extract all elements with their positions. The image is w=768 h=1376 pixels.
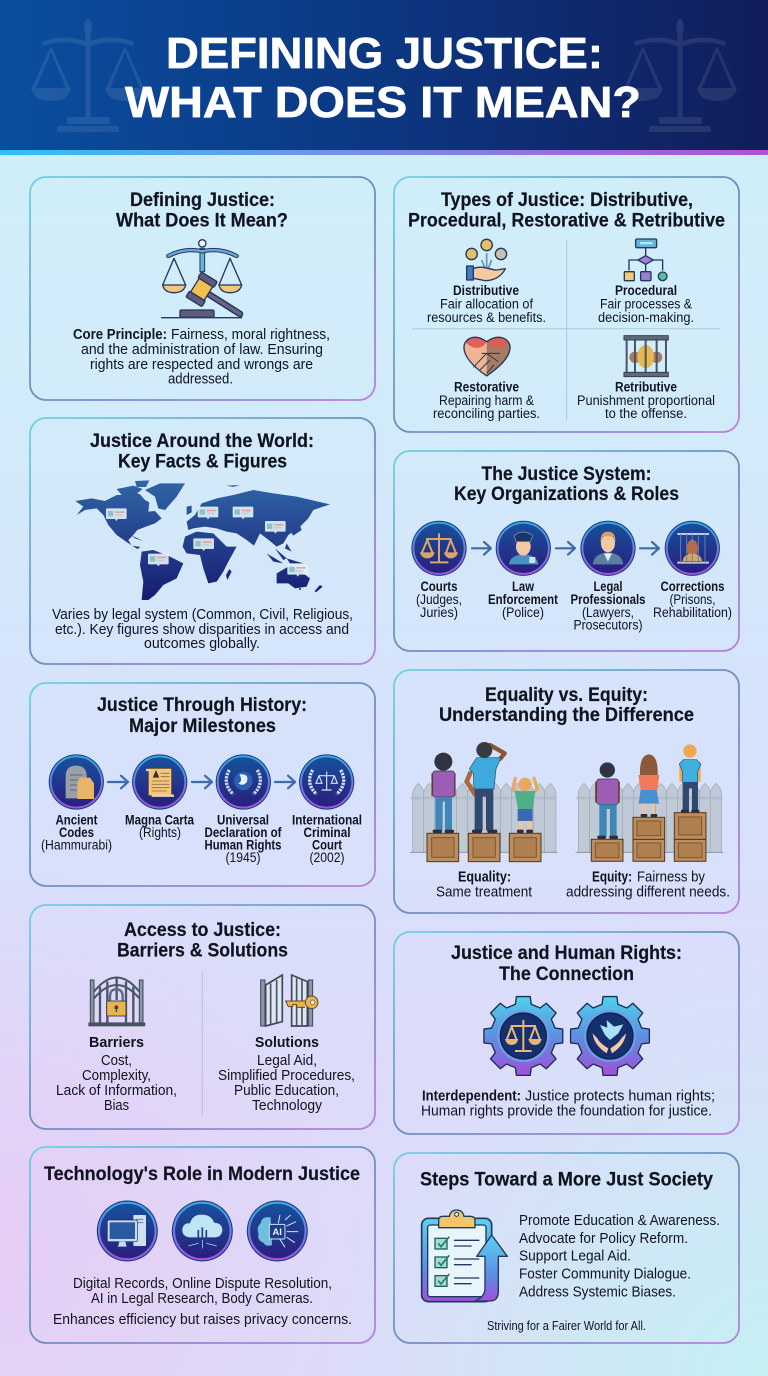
heading: Understanding the Difference	[439, 704, 694, 726]
text: solutions: Solutions	[255, 1035, 319, 1051]
text: solutions: Public Education,	[234, 1083, 339, 1099]
icon: universal declaration	[216, 754, 271, 810]
label	[427, 283, 546, 325]
labels	[416, 579, 732, 632]
text: interdependent: Human rights provide the foundation for justice.	[421, 1104, 712, 1120]
arrow	[556, 542, 575, 555]
text: core principle: rights are respected and wrongs are	[90, 357, 313, 373]
text: core principle: Fairness, moral rightness,	[171, 327, 330, 343]
heading	[116, 189, 288, 232]
heading: Equality vs. Equity:	[485, 684, 648, 706]
heading: Types of Justice: Distributive,	[441, 189, 693, 211]
arrow	[108, 776, 128, 788]
text: barriers: Cost,	[101, 1053, 132, 1069]
icon: clipboard with arrow	[422, 1210, 507, 1302]
sub-panel: procedural	[598, 239, 694, 325]
label: Procedural	[615, 283, 677, 298]
label: Restorative	[454, 380, 519, 394]
heading: Barriers & Solutions	[117, 940, 288, 962]
icon: right watermark scales	[623, 19, 737, 132]
labels: Prosecutors)	[574, 618, 642, 632]
heading: Justice Through History:	[97, 694, 307, 716]
text: equity caption: addressing different needs.	[566, 884, 730, 900]
text: core principle: Core Principle:	[73, 327, 167, 343]
icon: AI brain: AI	[272, 1227, 282, 1237]
title: DEFINING JUSTICE:	[166, 29, 603, 78]
text: technology	[53, 1276, 352, 1328]
label: Distributive	[453, 283, 519, 298]
icon: scales and gavel	[162, 240, 242, 318]
icon: jail bars	[624, 336, 668, 377]
label: Fair allocation of	[440, 296, 533, 312]
text: action list	[519, 1213, 720, 1301]
label: reconciling parties.	[433, 406, 540, 421]
icon: locked gate	[88, 977, 145, 1026]
sub-panel: distributive	[427, 239, 546, 325]
panel: technology	[30, 1147, 375, 1343]
labels: (Hammurabi)	[41, 838, 112, 852]
icon: AI brain	[247, 1201, 308, 1261]
header banner	[0, 0, 768, 155]
labels: Criminal	[304, 825, 350, 840]
text: action list: Address Systemic Biases.	[519, 1285, 676, 1301]
labels: Corrections	[660, 579, 724, 594]
label	[598, 283, 694, 325]
label	[433, 380, 540, 421]
icon: ancient codes	[49, 754, 104, 810]
panel: access to justice	[30, 905, 375, 1129]
labels: Courts	[420, 579, 458, 594]
heading: Justice and Human Rights:	[451, 942, 682, 964]
text: legal systems: etc.). Key figures show disparities in access and	[55, 622, 349, 638]
panel: justice around the world	[30, 418, 375, 664]
heading: Procedural, Restorative & Retributive	[408, 210, 725, 232]
text: action list: Promote Education & Awareness.	[519, 1213, 720, 1229]
text: solutions: Technology	[252, 1098, 323, 1114]
heading: Steps Toward a More Just Society	[420, 1168, 713, 1190]
text: barriers: Barriers	[89, 1035, 144, 1051]
labels: Magna Carta	[125, 812, 194, 828]
text: legal systems: Varies by legal system (Common, Civil, Religious,	[52, 607, 353, 623]
label: decision-making.	[598, 310, 694, 325]
panel: justice system	[394, 451, 739, 651]
heading: Major Milestones	[129, 715, 276, 737]
text: equality caption: Same treatment	[436, 884, 532, 900]
label	[577, 380, 715, 421]
text: equity caption	[566, 870, 730, 900]
text: barriers	[56, 1035, 177, 1114]
heading	[454, 463, 679, 505]
heading: Key Organizations & Roles	[454, 483, 679, 505]
text: closing line: Striving for a Fairer World for All.	[487, 1319, 646, 1333]
panel: equality vs equity	[394, 670, 739, 913]
icon: computer	[97, 1201, 158, 1261]
heading	[90, 430, 314, 472]
text: interdependent: Justice protects human rights;	[525, 1088, 715, 1104]
icon: left watermark scales	[31, 19, 145, 132]
text: core principle: addressed.	[168, 372, 233, 388]
text: equality caption	[436, 870, 532, 900]
text: solutions: Simplified Procedures,	[218, 1068, 355, 1084]
labels: Legal	[594, 579, 622, 594]
heading	[451, 942, 682, 985]
labels: (2002)	[310, 850, 344, 865]
text: action list: Support Legal Aid.	[519, 1249, 631, 1265]
heading: The Justice System:	[482, 463, 652, 485]
text: core principle: and the administration of law. Ensuring	[81, 342, 323, 358]
labels: Court	[312, 838, 342, 852]
heading	[439, 684, 694, 726]
labels: (Prisons,	[670, 592, 716, 607]
text: technology: Digital Records, Online Dispute Resolution,	[73, 1276, 332, 1292]
text: barriers: Bias	[104, 1098, 129, 1114]
sub-panel: restorative	[433, 337, 540, 421]
labels: (Judges,	[416, 592, 462, 607]
icon: law enforcement	[496, 521, 551, 576]
label: Punishment proportional	[577, 393, 715, 408]
icon: gear with dove and hands	[571, 997, 649, 1075]
text: core principle	[73, 327, 330, 388]
icon: courts	[411, 521, 467, 576]
labels: (Lawyers,	[582, 605, 634, 620]
labels: Juries)	[420, 605, 458, 620]
world map	[75, 480, 330, 600]
text: equity caption: Equity:	[592, 870, 632, 886]
labels: Codes	[59, 825, 94, 840]
text: solutions	[218, 1035, 355, 1114]
illustration: equity	[576, 744, 723, 861]
illustration: equality	[410, 742, 558, 862]
label: to the offense.	[605, 406, 687, 421]
panel: types of justice	[394, 177, 739, 432]
icon: legal professionals	[580, 521, 636, 576]
label: Repairing harm &	[439, 393, 534, 408]
arrow	[275, 776, 295, 788]
panel: steps toward a more just society	[394, 1153, 739, 1343]
arrow	[472, 542, 491, 555]
arrow	[640, 542, 659, 555]
labels	[41, 812, 362, 865]
text: barriers: Lack of Information,	[56, 1083, 177, 1099]
text: equity caption: Fairness by	[637, 870, 706, 886]
text: technology: AI in Legal Research, Body Cameras.	[91, 1291, 313, 1307]
text: action list: Advocate for Policy Reform.	[519, 1231, 688, 1247]
heading	[408, 189, 725, 232]
heading: The Connection	[499, 963, 634, 985]
icon: heart and handshake	[464, 337, 510, 376]
text: equality caption: Equality:	[458, 870, 511, 886]
icon: magna carta	[132, 754, 187, 810]
text: technology: Enhances efficiency but raises privacy concerns.	[53, 1312, 352, 1328]
title: WHAT DOES IT MEAN?	[125, 78, 641, 127]
heading: Access to Justice:	[124, 919, 281, 941]
labels: Universal	[217, 812, 269, 828]
arrow	[192, 776, 212, 788]
panel: justice through history	[30, 683, 375, 886]
label: Fair processes &	[600, 296, 692, 312]
text: legal systems	[52, 607, 353, 652]
panel: defining justice	[30, 177, 375, 400]
labels: Declaration of	[204, 825, 282, 840]
labels: Rehabilitation)	[653, 605, 732, 620]
icon: international criminal court	[299, 754, 354, 810]
title	[125, 29, 641, 127]
labels: (1945)	[226, 850, 260, 865]
labels: Law	[512, 579, 534, 594]
text: interdependent: Interdependent:	[422, 1088, 521, 1104]
heading	[97, 694, 307, 737]
labels: (Rights)	[139, 825, 181, 840]
heading: Defining Justice:	[130, 189, 275, 211]
heading: Key Facts & Figures	[118, 450, 287, 472]
icon: cloud	[172, 1201, 233, 1261]
labels: Professionals	[570, 592, 646, 607]
icon: open gate with key	[261, 975, 318, 1026]
text: legal systems: outcomes globally.	[144, 636, 260, 652]
icon: corrections	[665, 521, 720, 576]
sub-panel: retributive	[577, 336, 715, 421]
label: Retributive	[615, 380, 677, 394]
labels: International	[292, 812, 362, 828]
heading: Technology's Role in Modern Justice	[44, 1163, 360, 1185]
heading	[117, 919, 288, 962]
panel: justice and human rights	[394, 932, 739, 1134]
text: interdependent	[421, 1088, 715, 1120]
text: solutions: Legal Aid,	[257, 1053, 317, 1069]
labels: Enforcement	[488, 592, 558, 607]
icon: gear with scales	[484, 997, 563, 1075]
labels: (Police)	[502, 605, 544, 620]
labels: Ancient	[56, 812, 98, 828]
text: barriers: Complexity,	[82, 1068, 151, 1084]
icon: hand with coins	[466, 239, 507, 281]
icon: flowchart	[624, 239, 667, 281]
heading: What Does It Mean?	[116, 210, 288, 232]
heading: Justice Around the World:	[90, 430, 314, 452]
label: resources & benefits.	[427, 310, 546, 325]
labels: Human Rights	[204, 838, 282, 852]
text: action list: Foster Community Dialogue.	[519, 1267, 691, 1283]
